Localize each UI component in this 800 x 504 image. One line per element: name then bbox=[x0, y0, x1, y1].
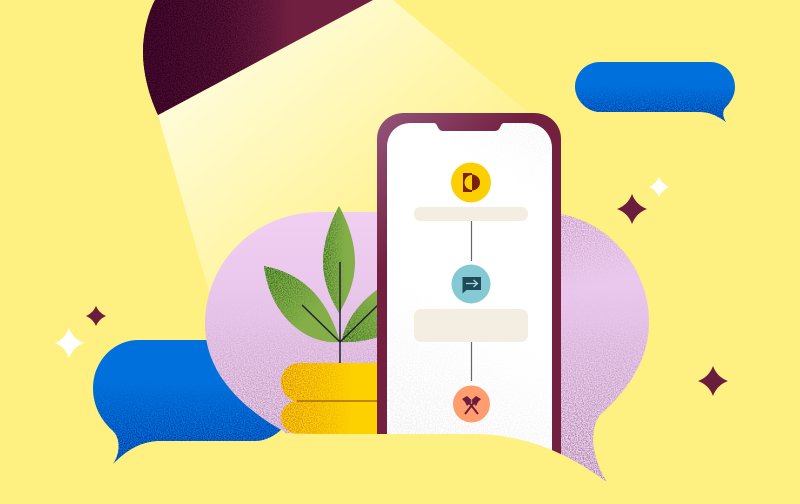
phone bbox=[377, 113, 561, 470]
light beam bbox=[158, 0, 640, 440]
plant stems bbox=[302, 262, 380, 364]
icon: crossed axes on orange bbox=[453, 386, 490, 422]
plant bbox=[264, 206, 395, 364]
icon: half circle on yellow bbox=[451, 162, 491, 202]
phone body bbox=[377, 113, 561, 470]
lamp shade bbox=[143, 0, 373, 115]
foreground yellow bubble bbox=[283, 433, 607, 504]
speech bubble: large pink bbox=[205, 212, 649, 482]
leaf: top bbox=[323, 206, 355, 313]
speech bubble: top right blue bbox=[575, 62, 735, 122]
leaf: right bbox=[341, 278, 395, 342]
sparkle: white upper right bbox=[649, 177, 669, 197]
speech bubble: lower left blue bbox=[93, 340, 283, 464]
plant pot bbox=[281, 363, 380, 436]
step placeholder: middle bbox=[414, 309, 528, 342]
icon: message arrow on teal bbox=[452, 264, 490, 304]
sparkle: maroon upper right bbox=[617, 194, 647, 224]
leaf: left bbox=[264, 266, 340, 342]
sparkle: maroon left bbox=[86, 306, 106, 326]
connector line: bottom bbox=[470, 342, 472, 381]
sparkle: white left bbox=[55, 328, 84, 358]
connector line: top bbox=[470, 221, 472, 261]
step placeholder: top bbox=[414, 207, 528, 221]
sparkle: maroon lower right bbox=[698, 366, 728, 396]
phone screen bbox=[387, 123, 552, 470]
